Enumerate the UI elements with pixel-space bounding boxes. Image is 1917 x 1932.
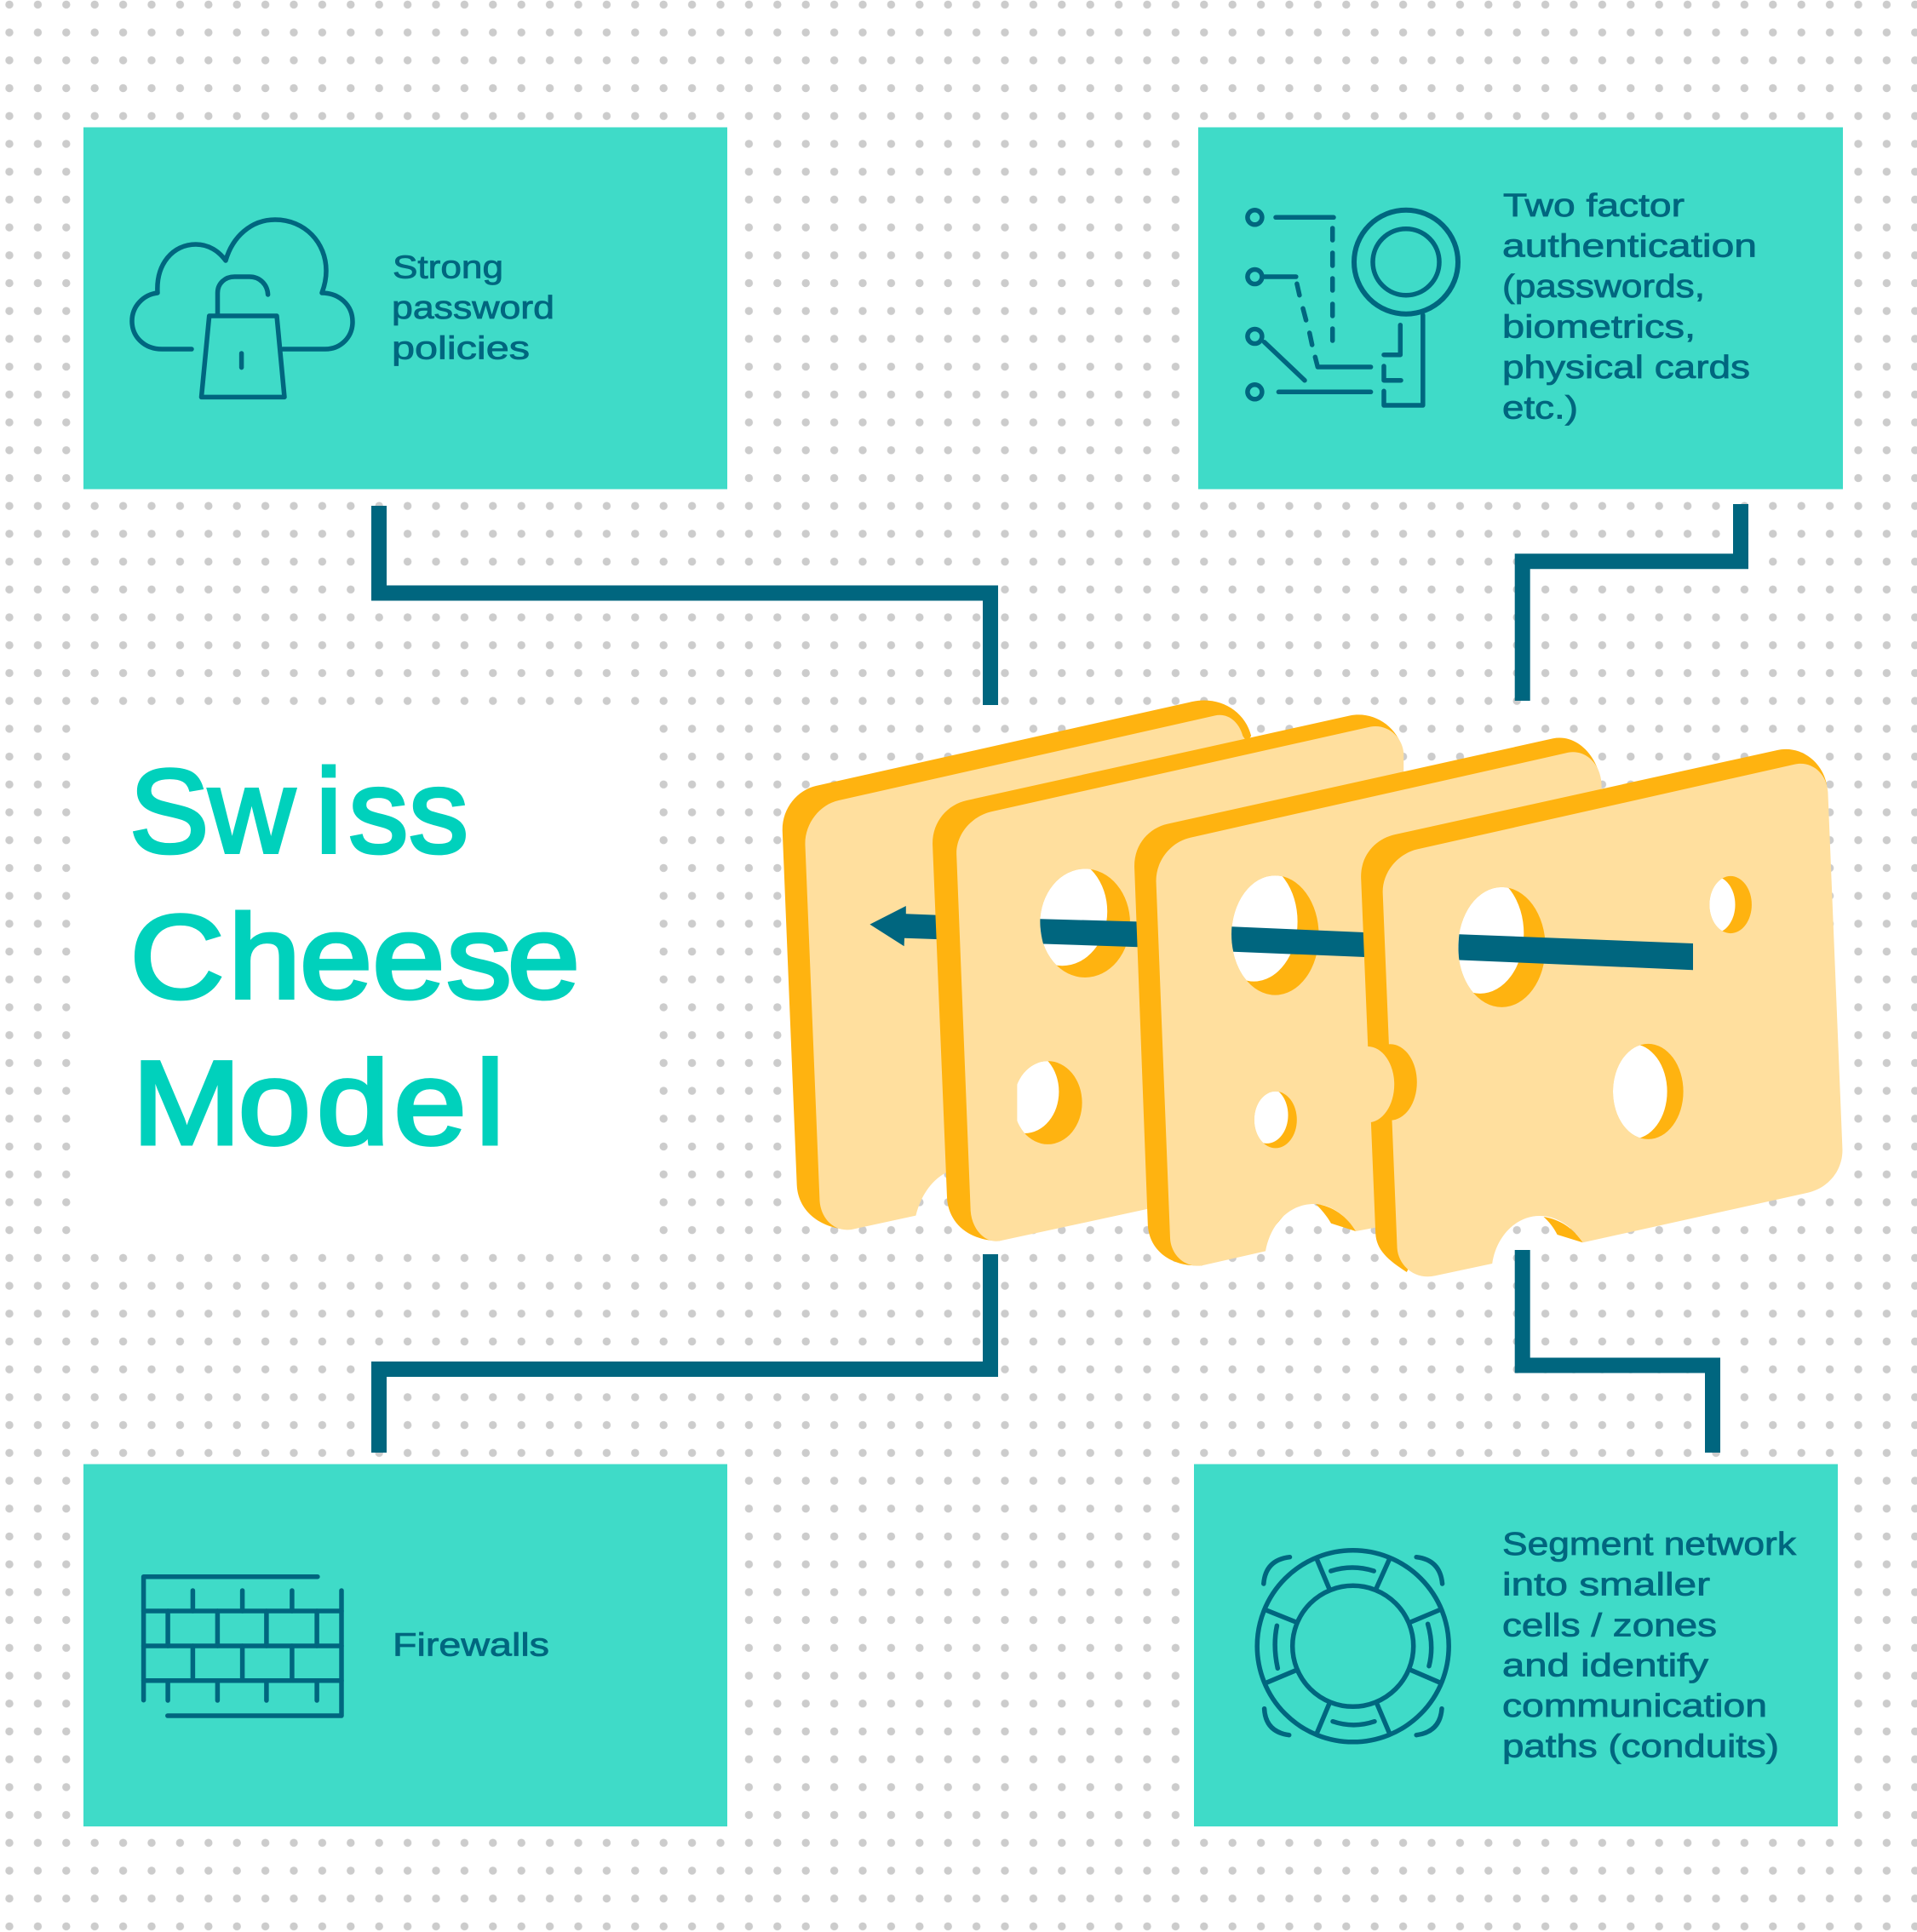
text: strong password policies: Strong — [393, 250, 503, 286]
arrow: connector cheese to firewalls — [379, 1254, 990, 1453]
icon: segmented ring — [1257, 1551, 1449, 1742]
text: segment network: and identify — [1502, 1648, 1708, 1683]
bar through slice 2 — [1040, 919, 1139, 947]
bar through slice 3 — [1231, 926, 1365, 957]
hole: upper left — [1458, 887, 1545, 1007]
chart: cheese slices with threat arrow — [783, 700, 1842, 1276]
icon: brick firewall — [144, 1577, 342, 1716]
arrow: connector strong password to cheese — [379, 506, 990, 705]
text: strong password policies: password — [392, 290, 554, 326]
panel: firewalls — [83, 1465, 727, 1826]
hole: upper — [1040, 869, 1130, 977]
icon: key with circuit lines — [1248, 210, 1458, 405]
text: segment network: Segment network — [1502, 1527, 1797, 1562]
cheese slice 1 — [783, 700, 1252, 1230]
text: two factor authentication: (passwords, — [1502, 269, 1705, 305]
hole: lower — [1254, 1092, 1297, 1148]
panel: strong password policies — [83, 128, 727, 489]
text: segment network: cells / zones — [1502, 1608, 1717, 1643]
cheese slice 2 — [933, 714, 1414, 1241]
title: Swiss — [129, 744, 468, 878]
panel: segment network — [1194, 1465, 1838, 1826]
text: two factor authentication: authentication — [1502, 229, 1757, 265]
text: two factor authentication: biometrics, — [1502, 310, 1696, 346]
hole: lower — [1613, 1044, 1684, 1139]
cheese slice 3 — [1134, 738, 1618, 1266]
icon: cloud with padlock — [132, 220, 353, 397]
text: segment network — [1502, 1527, 1797, 1764]
text: segment network: paths (conduits) — [1502, 1728, 1779, 1764]
hole: lower — [1017, 1061, 1082, 1144]
text: segment network: communication — [1502, 1688, 1767, 1724]
hole: upper right — [1710, 875, 1752, 933]
text: two factor authentication — [1502, 188, 1757, 427]
text: strong password policies — [392, 250, 554, 366]
text: strong password policies: policies — [392, 330, 530, 366]
text: firewalls: Firewalls — [393, 1628, 549, 1664]
title: Cheese — [129, 891, 580, 1023]
arrow: connector cheese to segment network — [1523, 1250, 1713, 1453]
text: segment network: into smaller — [1502, 1567, 1710, 1602]
text: two factor authentication: physical cards — [1502, 350, 1750, 386]
panel: two factor authentication — [1198, 128, 1843, 489]
hole: upper — [1231, 875, 1318, 995]
side notch — [1341, 1044, 1417, 1122]
notch sidewall — [1316, 1204, 1356, 1231]
cheese slice 4 — [1341, 749, 1842, 1276]
text: two factor authentication: Two factor — [1503, 188, 1685, 224]
bar through slice 4 — [1458, 934, 1693, 970]
title: Model — [132, 1037, 505, 1170]
title — [129, 744, 580, 1170]
arrow: connector two factor to cheese — [1523, 504, 1741, 701]
notch sidewall — [1543, 1217, 1582, 1242]
text: two factor authentication: etc.) — [1502, 391, 1578, 427]
arrow head through slice 1 — [870, 906, 938, 946]
